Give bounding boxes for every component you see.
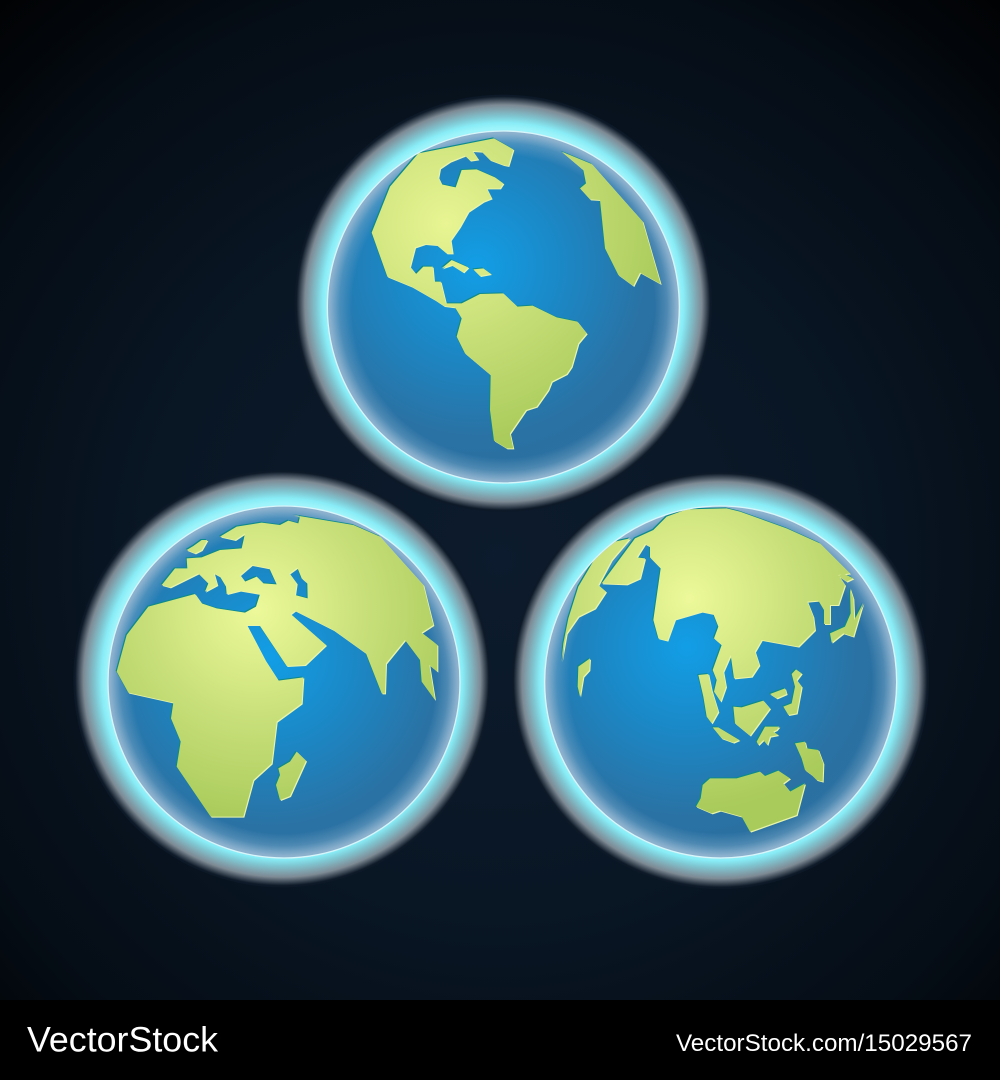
ocean disc [545, 506, 897, 858]
land: Japan [830, 588, 863, 643]
land: New Guinea [795, 742, 823, 782]
footer URL text: VectorStock.com/15029567 [676, 1030, 972, 1057]
land: Palawan [770, 688, 787, 698]
land: Java [713, 727, 739, 743]
globe: Asia and Australia [512, 472, 929, 889]
land: Madagascar [276, 752, 306, 800]
disc rim [327, 131, 679, 483]
footer logo text: VectorStock [27, 1020, 219, 1060]
land: Borneo [733, 701, 770, 736]
land: Sakhalin [838, 573, 853, 582]
halo [512, 472, 929, 889]
land: Australia [696, 771, 805, 832]
land: North and South America [372, 138, 587, 448]
globe: Africa and Eurasia [73, 470, 491, 887]
land: Hispaniola [473, 268, 491, 276]
disc rim [545, 506, 897, 858]
ocean disc [327, 131, 679, 483]
land: Sulawesi [757, 727, 779, 745]
land: Madagascar [578, 658, 590, 697]
land: west Africa and Europe edge [562, 152, 661, 286]
halo [295, 95, 712, 512]
land: Asia [602, 508, 850, 702]
land: Philippines [783, 669, 802, 715]
land: Africa, Europe and Asia [117, 515, 437, 817]
footer bar [0, 1000, 1000, 1080]
disc rim [108, 506, 460, 858]
land: Britain [187, 540, 207, 553]
ocean disc [108, 506, 460, 858]
halo [73, 470, 491, 887]
land: Cuba [442, 260, 468, 272]
land: east Africa [562, 538, 630, 662]
land: Sumatra [698, 674, 718, 723]
globe: Americas [295, 95, 712, 512]
